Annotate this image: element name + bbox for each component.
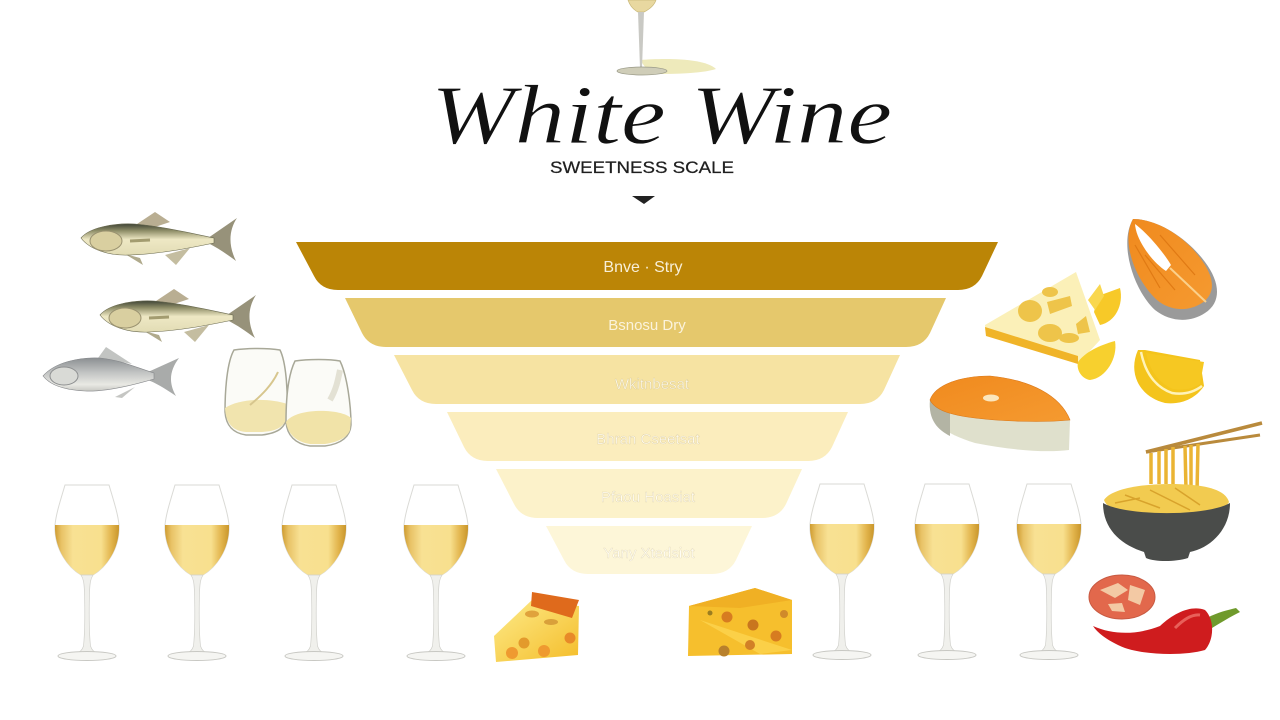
- band: medium sweet: Bhran Cseetsat: [596, 431, 701, 448]
- chopsticks: [1146, 423, 1262, 452]
- band: medium sweet: [447, 412, 848, 461]
- noodle strands: [1151, 444, 1198, 492]
- icon: wine glass 3: [282, 485, 346, 660]
- band: sweet: [496, 469, 802, 518]
- icon: wine glass 7: [1017, 484, 1081, 660]
- icon: tomato slice: [1089, 575, 1155, 619]
- tumbler left: [225, 348, 287, 435]
- band: sweet: Pfaou Hoasiat: [601, 489, 696, 506]
- icon: salmon steak top right: [1127, 219, 1217, 320]
- icon: top wine glass: [617, 0, 716, 75]
- icon: sardine fish 2: [100, 289, 256, 342]
- icon: wine glass 2: [165, 485, 229, 660]
- band: off dry: Wkitnbesat: [615, 376, 690, 393]
- icon: red chili pepper: [1093, 608, 1240, 654]
- lemon wedges on cheese: [1078, 284, 1121, 380]
- band: very sweet: [546, 526, 752, 574]
- icon: sardine fish 1: [81, 212, 237, 265]
- subtitle: SWEETNESS SCALE: [550, 158, 734, 177]
- icon: pale cheese with lemons: [985, 272, 1121, 380]
- band: very sweet: Yany Xtedsiot: [603, 545, 696, 562]
- tumbler right: [286, 360, 351, 446]
- icon: wine glass 4: [404, 485, 468, 660]
- icon: silver fish: [43, 347, 179, 398]
- band: bone dry: [296, 242, 998, 290]
- icon: wine glass 5: [810, 484, 874, 660]
- icon: lemon slice: [1134, 350, 1204, 403]
- icon: down arrow: [632, 196, 655, 204]
- icon: wine glass 1: [55, 485, 119, 660]
- band: bone dry: Bnve · Stry: [603, 259, 683, 276]
- icon: cheese right: [688, 588, 792, 656]
- band: semi dry: [345, 298, 946, 347]
- icon: tumbler glasses: [225, 348, 351, 446]
- icon: cheese left: [494, 592, 579, 662]
- icon: noodle bowl with chopsticks: [1103, 423, 1262, 561]
- band: off dry: [394, 355, 900, 404]
- icon: salmon steak lower: [930, 376, 1070, 451]
- icon: wine glass 6: [915, 484, 979, 660]
- title: White Wine: [431, 69, 892, 162]
- band: semi dry: Bsnosu Dry: [608, 317, 686, 334]
- funnel: sweetness scale: [296, 242, 998, 574]
